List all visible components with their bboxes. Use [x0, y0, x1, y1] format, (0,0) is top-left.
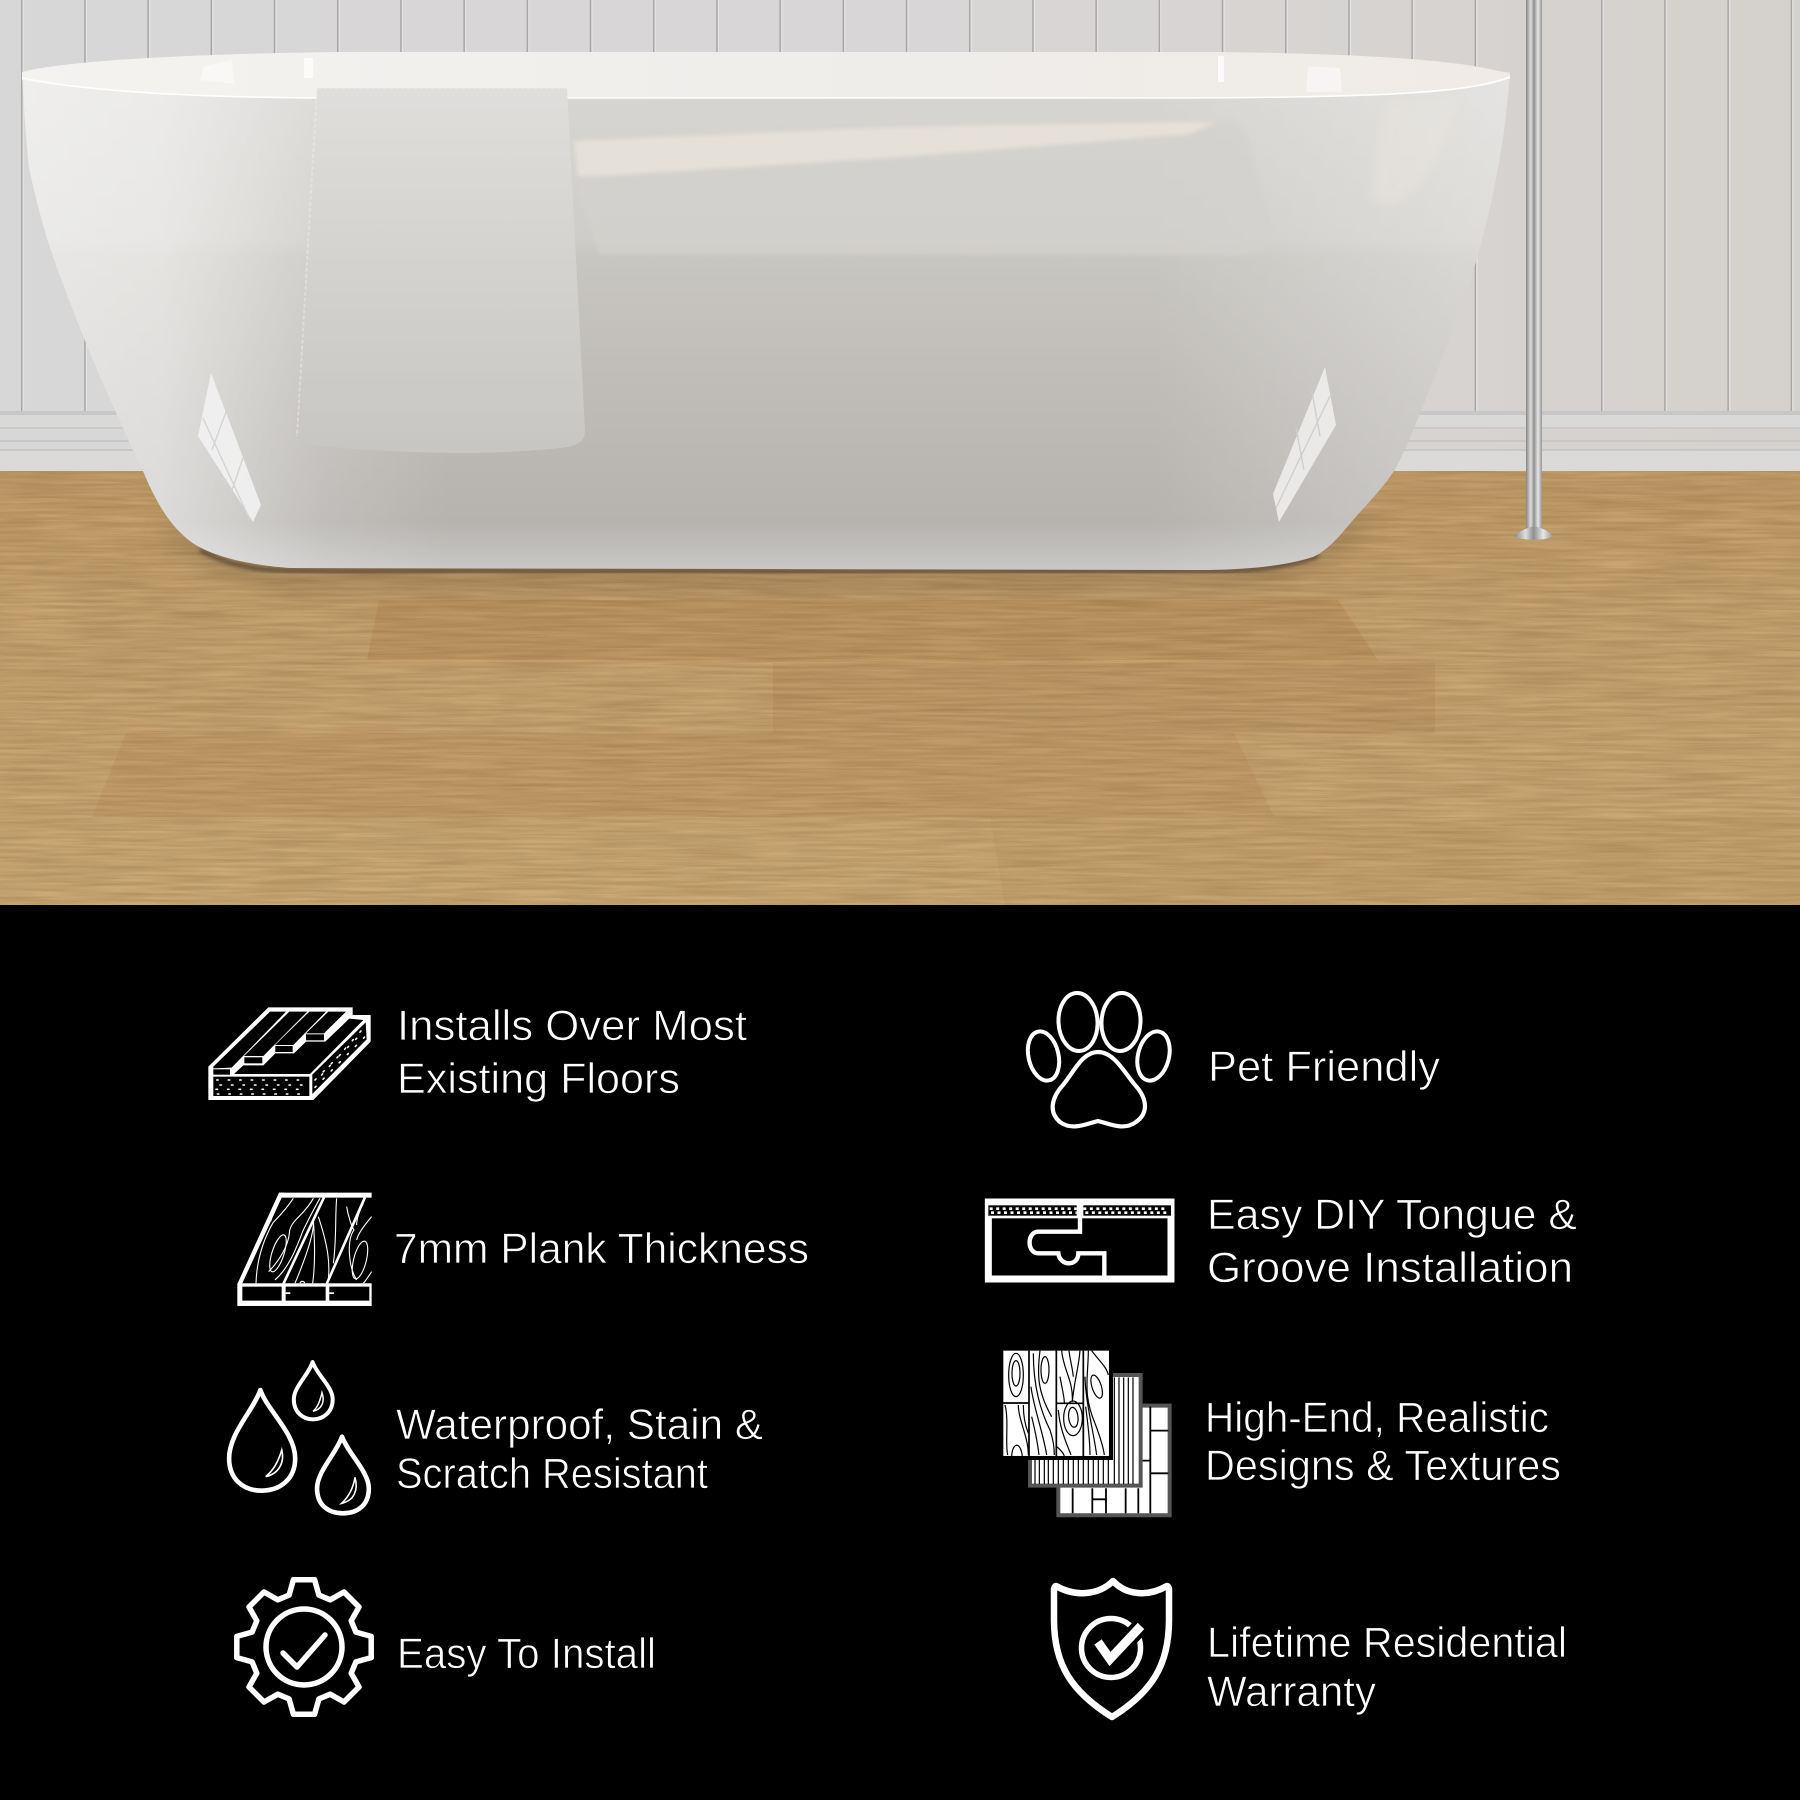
text	[397, 1002, 747, 1103]
text: Designs & Textures	[1205, 1442, 1561, 1490]
text: 7mm Plank Thickness	[394, 1225, 809, 1273]
tub shadow	[170, 520, 1360, 576]
text: Lifetime Residential	[1207, 1619, 1567, 1667]
panel: black features background	[0, 905, 1800, 1800]
icon: layered floor swatches	[1003, 1351, 1170, 1515]
text: Pet Friendly	[1208, 1043, 1440, 1091]
text: High-End, Realistic	[1205, 1394, 1549, 1442]
middle swatch	[1030, 1375, 1141, 1486]
reflection: right side warm window	[1372, 97, 1460, 205]
faucet pipe	[1514, 0, 1553, 540]
icon: gear with check	[237, 1580, 371, 1714]
reflection: wall light on tub side	[574, 120, 1273, 255]
feature: easy to install	[237, 1580, 656, 1714]
text: Easy To Install	[397, 1630, 656, 1678]
feature: high-end realistic designs and textures	[1003, 1351, 1561, 1515]
panel: photo of bathtub on wood floor	[0, 0, 1800, 905]
text	[1207, 1619, 1567, 1716]
text	[396, 1401, 763, 1498]
icon: paw print	[1023, 992, 1175, 1126]
text	[1207, 1191, 1577, 1292]
reflection: warm window strip	[574, 122, 1216, 176]
text: Existing Floors	[397, 1055, 680, 1103]
icon: water drops	[229, 1362, 369, 1513]
bathtub rim	[22, 52, 1510, 98]
text: Scratch Resistant	[396, 1450, 708, 1498]
towel	[297, 88, 585, 453]
feature: easy DIY tongue and groove installation	[988, 1191, 1577, 1292]
text	[1205, 1394, 1561, 1490]
feature: 7mm plank thickness	[237, 1193, 809, 1306]
icon: shield with check	[1054, 1581, 1169, 1717]
feature: pet friendly	[1023, 992, 1440, 1126]
reflection: right window panes	[1273, 367, 1336, 522]
icon: plank with wood grain	[237, 1193, 372, 1306]
feature: installs over most existing floors	[208, 1002, 747, 1103]
icon: floor cross-section	[208, 1007, 371, 1100]
feature: lifetime residential warranty	[1054, 1581, 1567, 1717]
text: Warranty	[1207, 1668, 1376, 1716]
feature: waterproof, stain and scratch resistant	[229, 1362, 763, 1513]
text: Groove Installation	[1207, 1244, 1573, 1292]
wall panelling	[0, 0, 1800, 472]
back swatch	[1058, 1406, 1170, 1515]
icon: tongue and groove profile	[988, 1199, 1171, 1279]
bathtub body	[22, 72, 1510, 570]
front swatch	[1003, 1351, 1113, 1460]
wood floor	[0, 471, 1800, 905]
text: Waterproof, Stain &	[396, 1401, 763, 1449]
text: Easy DIY Tongue &	[1207, 1191, 1577, 1239]
text: Installs Over Most	[397, 1002, 747, 1050]
reflection: left window panes	[198, 373, 261, 522]
